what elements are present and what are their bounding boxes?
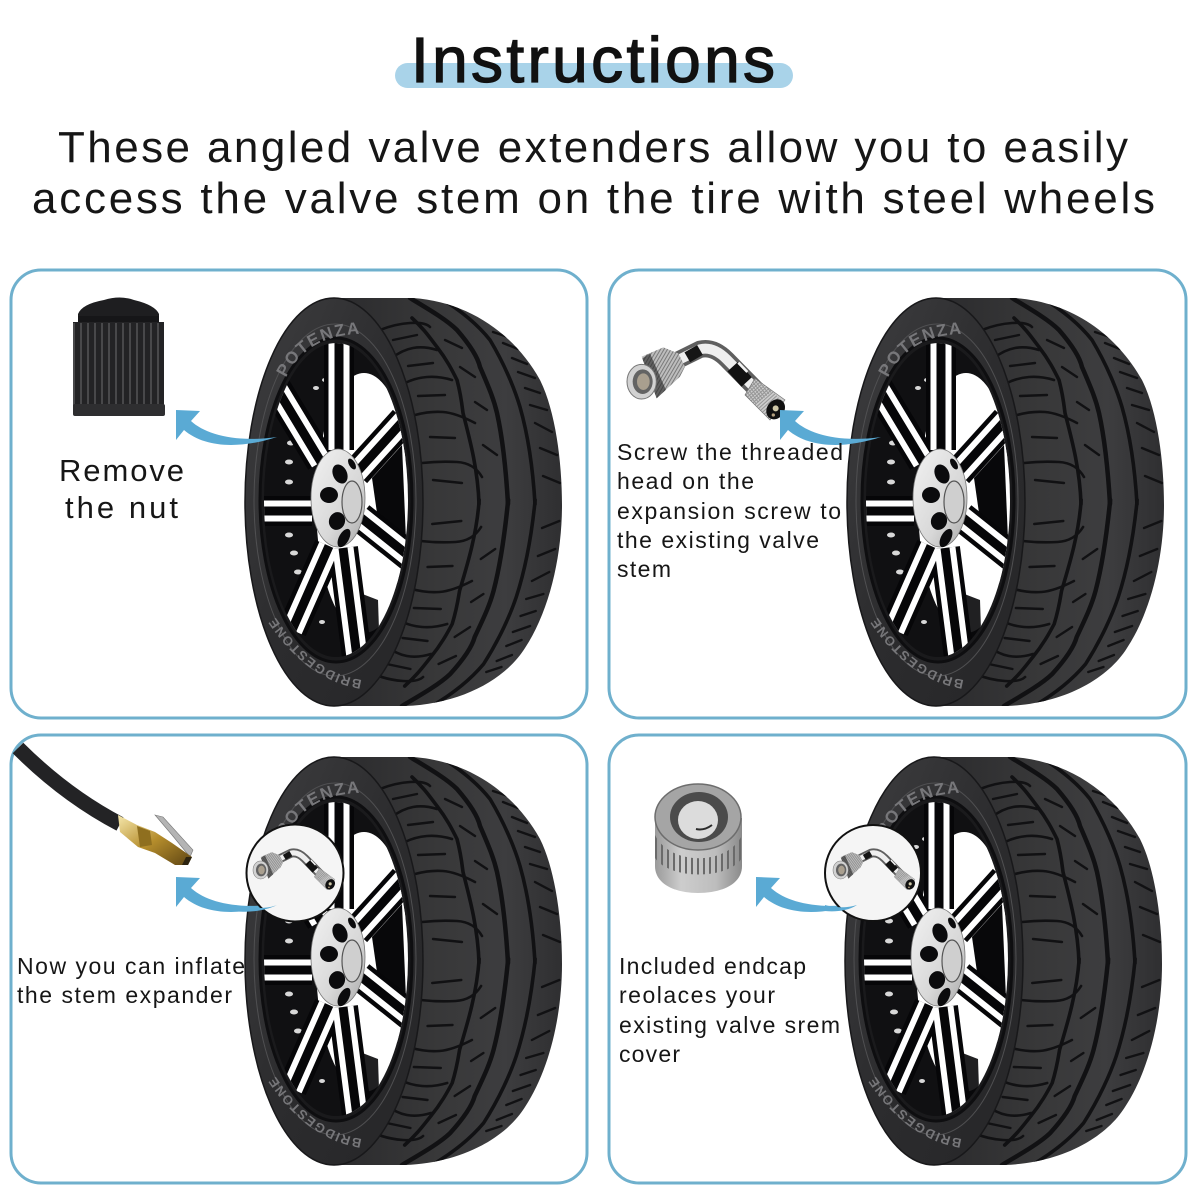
instruction text: cover [619, 1041, 680, 1067]
title text: Instructions [411, 24, 775, 96]
tire illustration: BRIDGESTONE [870, 618, 964, 689]
tire illustration: POTENZA [878, 322, 961, 377]
instruction text: head on the [617, 468, 754, 494]
instruction text: the existing valve [617, 527, 819, 553]
tire illustration: BRIDGESTONE [868, 1076, 962, 1148]
subtitle text: access the valve stem on the tire with steel wheels [32, 174, 1155, 223]
tire illustration: BRIDGESTONE [268, 618, 362, 689]
icon: metal endcap [655, 784, 742, 893]
panel: step 3 inflate [10, 734, 588, 1184]
tire illustration [846, 297, 1164, 707]
icon: air hose with brass chuck [18, 748, 193, 865]
magnifier inset with extender [825, 825, 921, 921]
icon: black valve nut [73, 298, 165, 416]
tire illustration [244, 756, 562, 1166]
arrow [756, 877, 857, 912]
panel: step 1 remove the nut [10, 268, 588, 720]
label: remove the nut: the nut [65, 490, 178, 525]
panel border [609, 270, 1186, 718]
tire illustration [844, 756, 1162, 1166]
instruction text: expansion screw to [617, 498, 841, 524]
instruction text: existing valve srem [619, 1012, 840, 1038]
arrow [176, 410, 277, 445]
tire illustration: POTENZA [880, 782, 959, 826]
tire illustration [244, 297, 562, 707]
tire illustration: POTENZA [276, 322, 359, 377]
title [395, 24, 793, 96]
panel: step 2 screw on the extender [608, 268, 1188, 720]
instruction text [17, 953, 245, 1008]
instruction text: the stem expander [17, 982, 232, 1008]
instruction text: Screw the threaded [617, 439, 843, 465]
instruction text: Included endcap [619, 953, 806, 979]
panel border [11, 735, 587, 1183]
tire illustration: BRIDGESTONE [268, 1076, 362, 1148]
instruction text: reolaces your [619, 982, 775, 1008]
instruction text: stem [617, 556, 671, 582]
title highlight pill [395, 63, 793, 88]
instruction text [619, 953, 840, 1067]
magnifier inset with extender [235, 824, 344, 922]
label: remove the nut: Remove [59, 453, 184, 488]
arrow [780, 410, 881, 445]
instruction text: Now you can inflate [17, 953, 245, 979]
instruction text [617, 439, 843, 582]
label: remove the nut [59, 453, 184, 525]
tire illustration: POTENZA [278, 782, 359, 826]
panel: step 4 endcap [608, 734, 1188, 1184]
panel border [609, 735, 1186, 1183]
arrow [176, 877, 277, 912]
subtitle text [32, 123, 1155, 223]
icon: angled valve extender [627, 347, 789, 423]
subtitle text: These angled valve extenders allow you to easily [58, 123, 1128, 172]
panel border [11, 270, 587, 718]
